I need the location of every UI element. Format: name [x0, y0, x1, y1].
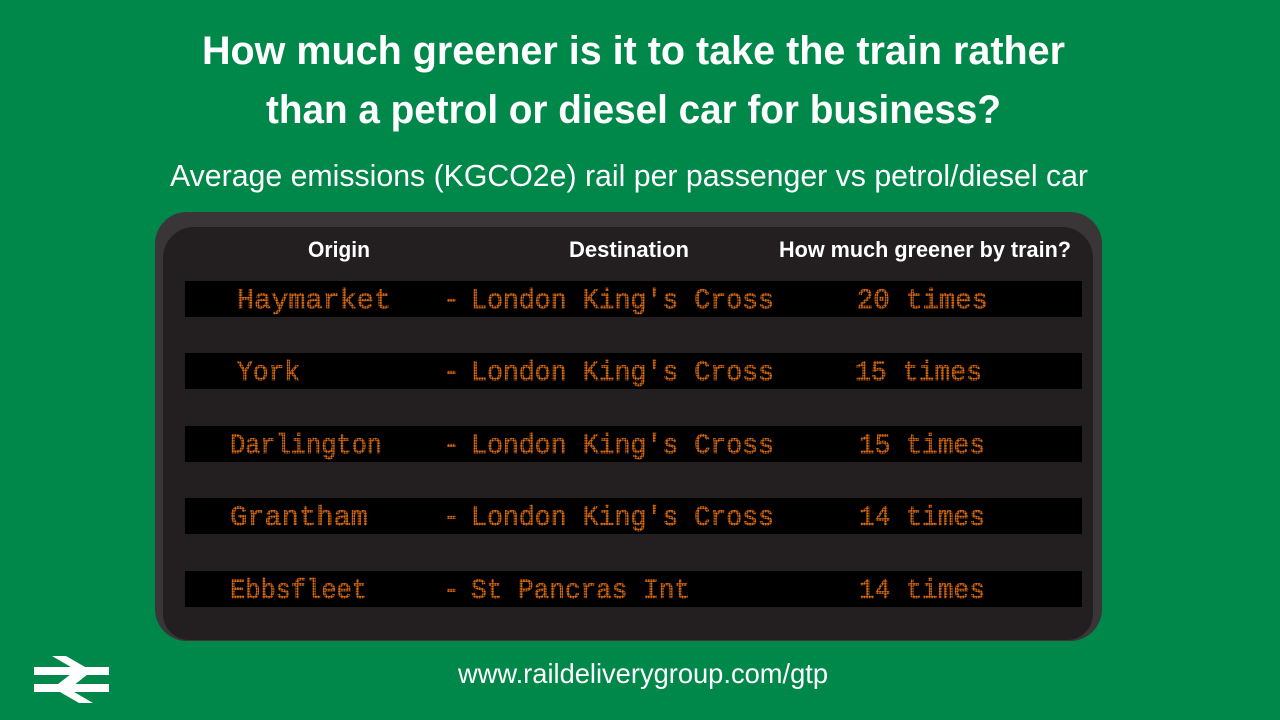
row: Haymarket: 20 times: [857, 286, 988, 317]
row: Ebbsfleet: -: [443, 576, 460, 607]
row: Grantham: -: [443, 503, 460, 534]
website url: www.raildeliverygroup.com/gtp: [457, 658, 828, 689]
row: Haymarket: Haymarket: [237, 286, 391, 317]
title: than a petrol or diesel car for business?: [266, 88, 1001, 132]
row: Grantham: Grantham: [230, 503, 368, 534]
panel: departure board: [155, 212, 1102, 641]
title: [202, 29, 1065, 132]
row: Darlington: 15 times: [859, 431, 985, 462]
row: Ebbsfleet: [185, 571, 1082, 607]
subtitle: Average emissions (KGCO2e) rail per passenger vs petrol/diesel car: [170, 158, 1088, 193]
row: York: -: [443, 358, 460, 389]
row: Ebbsfleet: 14 times: [859, 576, 985, 607]
row: Ebbsfleet: Ebbsfleet: [230, 576, 367, 607]
column headings: Destination: [569, 237, 689, 262]
row: York: 15 times: [855, 358, 982, 389]
row: Darlington: -: [443, 431, 460, 462]
row: York: [185, 353, 1082, 389]
row: Darlington: [185, 426, 1082, 462]
column headings: How much greener by train?: [779, 237, 1071, 262]
row: Ebbsfleet: St Pancras Int: [471, 576, 690, 607]
row: Grantham: 14 times: [859, 503, 985, 534]
row: Darlington: Darlington: [230, 431, 382, 462]
row: Haymarket: -: [443, 286, 460, 317]
row: Grantham: [185, 498, 1082, 534]
row: Haymarket: London King's Cross: [471, 286, 774, 317]
column headings: [308, 237, 1071, 262]
icon: National Rail double arrow: [34, 656, 109, 703]
row: Grantham: London King's Cross: [471, 503, 774, 534]
title: How much greener is it to take the train rather: [202, 29, 1065, 73]
row: Darlington: London King's Cross: [471, 431, 774, 462]
row: York: London King's Cross: [471, 358, 774, 389]
row: York: York: [237, 358, 300, 389]
row: Haymarket: [185, 281, 1082, 317]
column headings: Origin: [308, 237, 370, 262]
